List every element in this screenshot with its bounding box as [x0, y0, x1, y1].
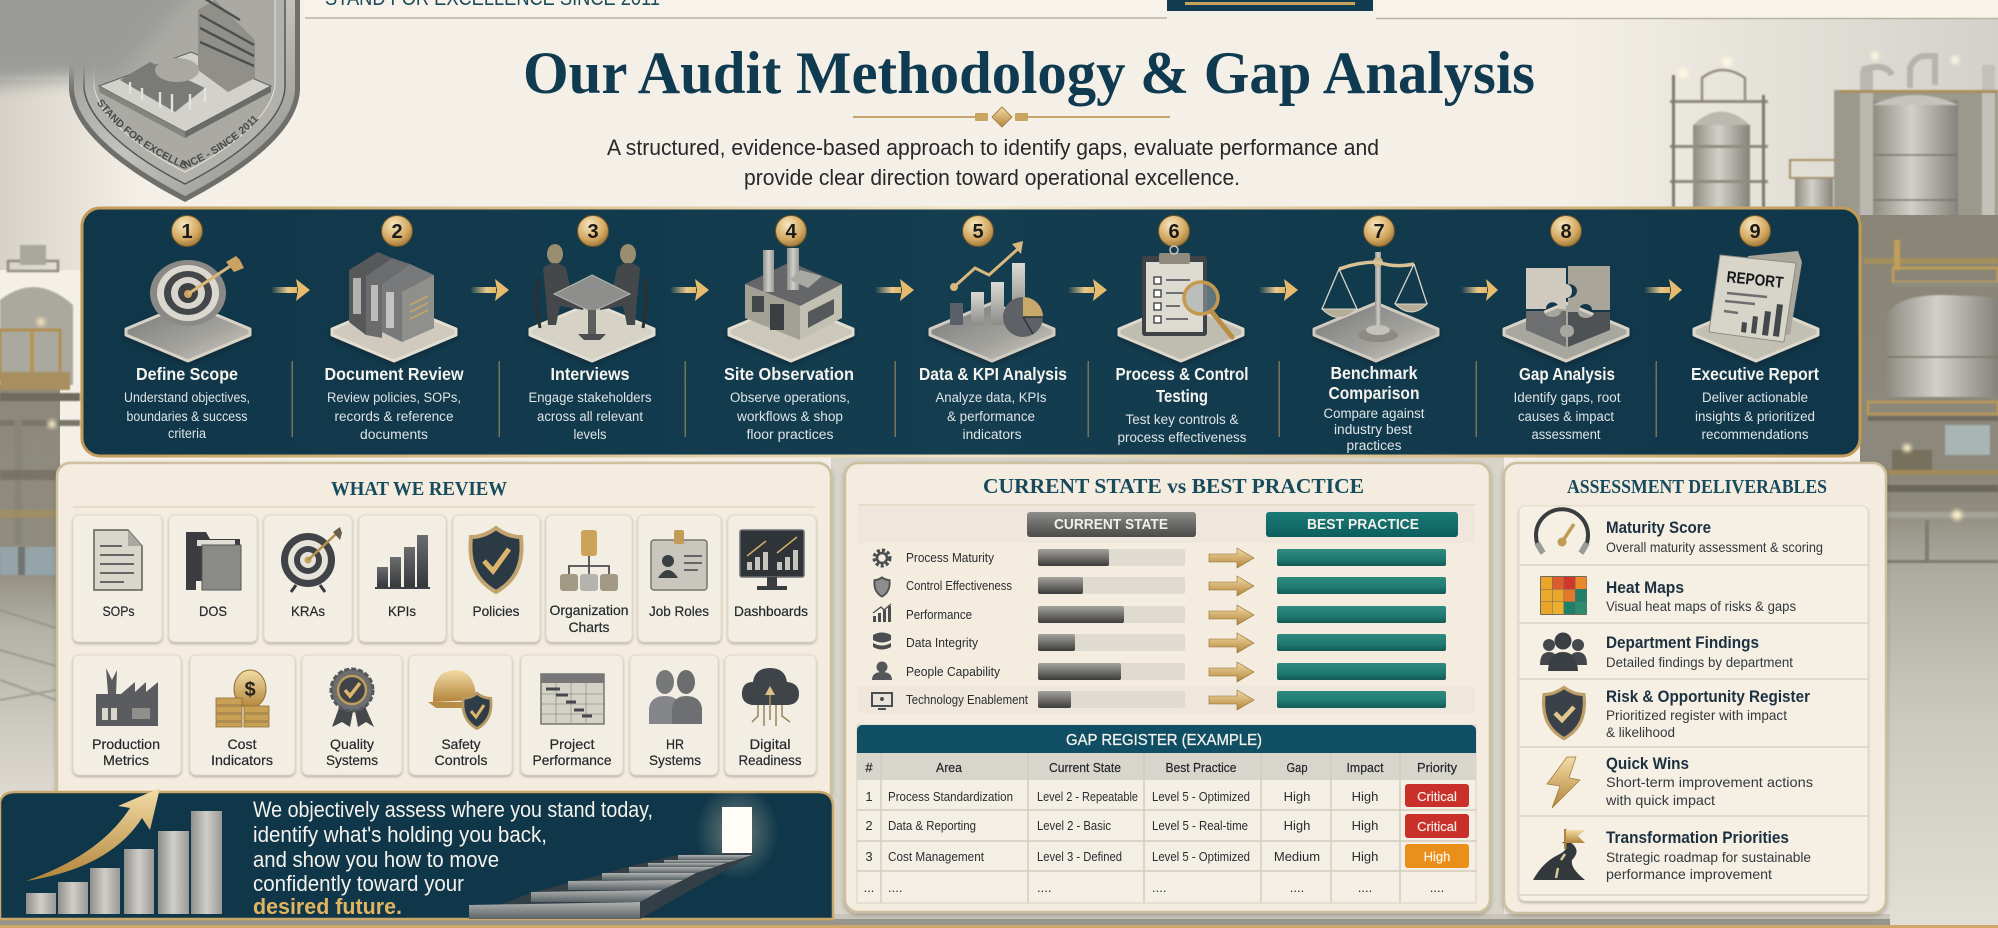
emblem shield [0, 0, 300, 202]
table row 1: Critical [1417, 789, 1457, 804]
subtitle: A structured, evidence-based approach to identify gaps, evaluate performance and [607, 135, 1379, 160]
panel: audit process steps [82, 208, 1860, 456]
panel: assessment deliverables [1504, 463, 1886, 913]
step descriptions: boundaries & success [126, 409, 248, 424]
table row 1 [865, 784, 1469, 807]
card: SOPs [73, 515, 162, 642]
table column headers: Area [936, 760, 963, 775]
step 5: data and KPI analysis: 5 [972, 221, 984, 243]
table column headers: Impact [1346, 760, 1384, 775]
deliverable: maturity score: Maturity Score [1606, 519, 1711, 537]
left refinery [0, 245, 80, 795]
step descriptions: Test key controls & [1126, 412, 1238, 427]
deliverable: department findings: Department Findings [1606, 634, 1759, 652]
card: KRAs [264, 515, 352, 642]
table row 1: 1 [865, 789, 873, 804]
card: Cost Indicators: $ [244, 679, 256, 701]
card: Production Metrics: Production [92, 736, 160, 752]
deliverable: heat maps: Heat Maps [1606, 579, 1684, 597]
card: DOS: DOS [199, 603, 227, 619]
step descriptions: assessment [1532, 427, 1601, 442]
step titles: Benchmark [1330, 363, 1418, 383]
table row 4 placeholder [864, 880, 1444, 895]
card: Safety Controls: Controls [434, 752, 488, 768]
icon: binders [349, 252, 434, 342]
step descriptions: Review policies, SOPs, [327, 390, 461, 405]
step 6: process and control testing [1119, 216, 1243, 361]
card: DOS [169, 515, 257, 642]
step 1: define scope [126, 216, 250, 361]
top header bar [305, 0, 1998, 18]
step descriptions: Engage stakeholders [528, 390, 652, 405]
deliverable: department findings [1540, 632, 1793, 671]
subtitle [607, 135, 1379, 190]
step titles: Comparison [1328, 383, 1420, 403]
table row 1: Level 5 - Optimized [1152, 789, 1250, 804]
table row 1: Process Standardization [888, 789, 1013, 804]
icon: factory [745, 248, 842, 340]
step descriptions: workflows & shop [736, 409, 843, 424]
banner statement: and show you how to move [253, 847, 499, 872]
step 3: interviews [530, 216, 654, 361]
table row 4 placeholder: .... [1290, 880, 1304, 895]
card: Organization Charts: Charts [568, 619, 610, 635]
step titles: Gap Analysis [1519, 364, 1615, 384]
table row 3: Cost Management [888, 849, 984, 864]
deliverable: quick wins: Quick Wins [1606, 755, 1689, 773]
card: KRAs: KRAs [291, 603, 325, 619]
icon: balance scale [1322, 252, 1427, 342]
step descriptions: indicators [962, 427, 1022, 442]
card: Organization Charts: Organization [550, 602, 628, 618]
step 7: benchmark comparison [1314, 216, 1438, 361]
step titles: Testing [1156, 386, 1208, 406]
step 9: executive report [1694, 216, 1818, 361]
step 8: gap analysis [1504, 216, 1628, 361]
table row 4 placeholder: .... [1430, 880, 1444, 895]
icon: meeting at table [536, 244, 647, 340]
growth bars [26, 811, 222, 914]
card: Dashboards: Dashboards [734, 603, 808, 619]
banner statement: desired future. [253, 894, 402, 919]
deliverable: heat maps [1540, 576, 1796, 615]
step descriptions: & performance [947, 409, 1035, 424]
deliverable: transformation priorities: Strategic roadmap for sustainable [1606, 849, 1811, 865]
row: control effectiveness: Control Effectiveness [906, 579, 1012, 593]
icon: heat map grid [1540, 576, 1587, 615]
card: Policies: Policies [472, 603, 520, 619]
step descriptions: causes & impact [1518, 409, 1614, 424]
step descriptions: Analyze data, KPIs [936, 390, 1047, 405]
step 4: site observation [729, 216, 853, 361]
step titles: Site Observation [724, 364, 854, 384]
card: Safety Controls: Safety [442, 736, 480, 752]
table row 3: Medium [1274, 849, 1320, 864]
deliverable: heat maps: Visual heat maps of risks & gaps [1606, 598, 1796, 614]
top right refinery towers [1670, 52, 1998, 265]
table column headers: Best Practice [1166, 760, 1236, 775]
step descriptions: insights & prioritized [1695, 409, 1815, 424]
step 8: gap analysis: 8 [1560, 221, 1572, 243]
deliverable: risk and opportunity register: Prioritized register with impact [1606, 707, 1787, 723]
arrow 4 [875, 279, 914, 301]
icon: report document [1709, 251, 1802, 342]
card: HR Systems: HR [666, 736, 684, 752]
table column headers: Gap [1286, 760, 1308, 775]
step 5: data and KPI analysis [930, 216, 1054, 361]
card: Quality Systems [302, 655, 402, 775]
deliverable: transformation priorities [1533, 829, 1811, 882]
table row 2: Level 5 - Real-time [1152, 818, 1248, 833]
row: technology enablement: Technology Enablement [906, 693, 1028, 707]
arrow 5 [1068, 279, 1107, 301]
step 1: define scope: 1 [181, 221, 193, 243]
arrow 2 [470, 279, 509, 301]
card: Project Performance [521, 655, 623, 775]
step descriptions [124, 390, 1815, 453]
step descriptions: records & reference [334, 409, 454, 424]
step titles: Define Scope [136, 364, 238, 384]
row: people capability: People Capability [906, 665, 1001, 679]
deliverable: risk and opportunity register [1544, 687, 1811, 740]
table row 3: 3 [865, 849, 873, 864]
step descriptions: practices [1346, 438, 1402, 453]
step 7: benchmark comparison: 7 [1373, 221, 1385, 243]
card: HR Systems: Systems [649, 752, 701, 768]
icon: charts [950, 241, 1043, 337]
table column headers: # [865, 760, 873, 775]
heading: what we review: WHAT WE REVIEW [331, 478, 507, 500]
right refinery lower plant [1860, 215, 1998, 928]
step 4: site observation: 4 [785, 221, 797, 243]
step descriptions: floor practices [746, 427, 834, 442]
deliverable: transformation priorities: Transformation Priorities [1606, 829, 1789, 847]
table row 2: Critical [1417, 819, 1457, 834]
row: process maturity [874, 548, 1446, 568]
table row 1: High [1352, 789, 1378, 804]
step titles: Data & KPI Analysis [919, 364, 1067, 384]
card: Project Performance: Project [550, 736, 595, 752]
step 3: interviews: 3 [587, 221, 599, 243]
step descriptions: criteria [168, 426, 206, 441]
table row 4 placeholder: .... [888, 880, 902, 895]
deliverable: risk and opportunity register: & likelihood [1606, 724, 1675, 740]
card: KPIs: KPIs [388, 603, 416, 619]
row: performance [873, 604, 1446, 625]
row: data integrity: Data Integrity [906, 636, 979, 650]
banner statement: confidently toward your [253, 871, 464, 896]
card: Organization Charts [546, 515, 632, 642]
table column headers: Current State [1049, 760, 1121, 775]
step descriptions: Observe operations, [730, 390, 850, 405]
icon: clipboard with magnifier [1142, 246, 1232, 337]
emblem motto: STAND FOR EXCELLENCE - SINCE 2011 [98, 100, 258, 169]
step descriptions: Compare against [1324, 406, 1425, 421]
table row 2: High [1284, 818, 1310, 833]
step descriptions: process effectiveness [1118, 430, 1247, 445]
table row 2: Data & Reporting [888, 818, 976, 833]
deliverable: quick wins: with quick impact [1605, 792, 1715, 808]
card: Digital Readiness [725, 655, 816, 775]
column header: best practice [1266, 512, 1458, 537]
table row 1: High [1284, 789, 1310, 804]
column header: current state [1027, 512, 1196, 537]
step titles: Process & Control [1116, 364, 1248, 384]
step titles [136, 363, 1819, 406]
row: people capability [872, 662, 1446, 682]
banner: closing statement [0, 784, 833, 919]
card: Cost Indicators: Cost [228, 736, 257, 752]
card: Project Performance: Performance [532, 752, 612, 768]
step descriptions: recommendations [1702, 427, 1809, 442]
card: Cost Indicators: Indicators [211, 752, 273, 768]
table row 2: 2 [865, 818, 873, 833]
arrow 8 [1644, 279, 1682, 301]
card: Job Roles: Job Roles [649, 603, 709, 619]
row: data integrity [873, 632, 1446, 653]
step 2: document review: 2 [391, 221, 403, 243]
step titles: Executive Report [1691, 364, 1819, 384]
table row 2: Level 2 - Basic [1037, 818, 1111, 833]
deliverable: department findings: Detailed findings by department [1606, 654, 1793, 670]
icon: team [1540, 632, 1587, 671]
deliverable: maturity score [1536, 509, 1823, 555]
header tab center [1167, 0, 1373, 11]
table row 3: High [1424, 849, 1450, 864]
table row 3 [865, 844, 1469, 868]
arrow 6 [1259, 279, 1298, 301]
staircase to doorway [469, 784, 779, 919]
table row 2 [865, 814, 1469, 838]
table row 4 placeholder: .... [1152, 880, 1166, 895]
column header: best practice: BEST PRACTICE [1307, 516, 1419, 533]
table row 4 placeholder: ... [864, 880, 874, 895]
table row 1: Level 2 - Repeatable [1037, 789, 1138, 804]
deliverable: quick wins: Short-term improvement actions [1606, 774, 1813, 790]
table column headers [857, 753, 1476, 780]
card: HR Systems [630, 655, 718, 775]
table row 4 placeholder: .... [1037, 880, 1051, 895]
table row 3: Level 3 - Defined [1037, 849, 1122, 864]
table row 3: High [1352, 849, 1378, 864]
deliverable: quick wins [1547, 755, 1813, 808]
heading: current state vs best practice: CURRENT STATE vs BEST PRACTICE [983, 474, 1364, 498]
subtitle: provide clear direction toward operational excellence. [744, 165, 1240, 190]
card: KPIs [359, 515, 446, 642]
step 9: executive report: 9 [1749, 221, 1761, 243]
card: Production Metrics: Metrics [103, 752, 149, 768]
icon: target [150, 256, 244, 326]
table column headers: Priority [1417, 760, 1457, 775]
table row 2: High [1352, 818, 1378, 833]
card: Job Roles [638, 515, 721, 642]
deliverable: risk and opportunity register: Risk & Opportunity Register [1606, 688, 1811, 706]
step titles: Document Review [324, 364, 464, 384]
card: SOPs: SOPs [102, 603, 134, 619]
row: control effectiveness [874, 576, 1446, 597]
title divider ornament [853, 107, 1170, 127]
deliverable: maturity score: Overall maturity assessment & scoring [1606, 539, 1823, 555]
table: gap register [857, 725, 1476, 903]
arrow 1 [271, 279, 310, 301]
panel: current state vs best practice [845, 463, 1490, 912]
card: Policies [453, 515, 540, 642]
card: Digital Readiness: Readiness [738, 752, 802, 768]
arrow 7 [1461, 279, 1498, 301]
banner statement [253, 797, 653, 919]
table title [857, 725, 1476, 753]
growth arrow [26, 788, 160, 881]
card: Dashboards [728, 515, 816, 642]
title: Our Audit Methodology & Gap Analysis [523, 40, 1535, 106]
card: Quality Systems: Systems [326, 752, 378, 768]
deliverable: transformation priorities: performance improvement [1606, 866, 1772, 882]
step 6: process and control testing: 6 [1168, 221, 1180, 243]
card: Safety Controls [409, 655, 512, 775]
step descriptions: documents [360, 427, 428, 442]
column header: current state: CURRENT STATE [1054, 516, 1168, 533]
card: Production Metrics [73, 655, 181, 775]
card: Cost Indicators [190, 655, 295, 775]
table title: GAP REGISTER (EXAMPLE) [1066, 732, 1262, 749]
icon: lightning bolt [1547, 757, 1580, 808]
step descriptions: levels [574, 427, 607, 442]
card: Digital Readiness: Digital [750, 736, 790, 752]
icon: road with flag [1533, 829, 1585, 880]
step descriptions: Deliver actionable [1702, 390, 1808, 405]
step titles: Interviews [550, 364, 630, 384]
step descriptions: industry best [1334, 422, 1412, 437]
icon: gauge [1536, 509, 1588, 553]
icon: report document: REPORT [1726, 269, 1784, 292]
step 2: document review [332, 216, 456, 361]
heading: assessment deliverables: ASSESSMENT DELIVERABLES [1567, 476, 1827, 498]
panel: what we review [57, 463, 831, 803]
step descriptions: Understand objectives, [124, 390, 250, 405]
header band left [305, 0, 1167, 18]
emblem building [99, 0, 271, 138]
icon: shield [1544, 687, 1584, 739]
table row 3: Level 5 - Optimized [1152, 849, 1250, 864]
arrow 3 [670, 279, 709, 301]
icon: puzzle pieces [1526, 266, 1610, 347]
step descriptions: Identify gaps, root [1514, 390, 1621, 405]
row: process maturity: Process Maturity [906, 551, 995, 565]
banner statement: We objectively assess where you stand today, [253, 797, 653, 822]
banner statement: identify what's holding you back, [253, 822, 547, 847]
table row 4 placeholder: .... [1358, 880, 1372, 895]
row: technology enablement [858, 686, 1475, 713]
step descriptions: across all relevant [537, 409, 643, 424]
header band right [1376, 0, 1998, 18]
card: Quality Systems: Quality [330, 736, 374, 752]
row: performance: Performance [906, 608, 972, 622]
